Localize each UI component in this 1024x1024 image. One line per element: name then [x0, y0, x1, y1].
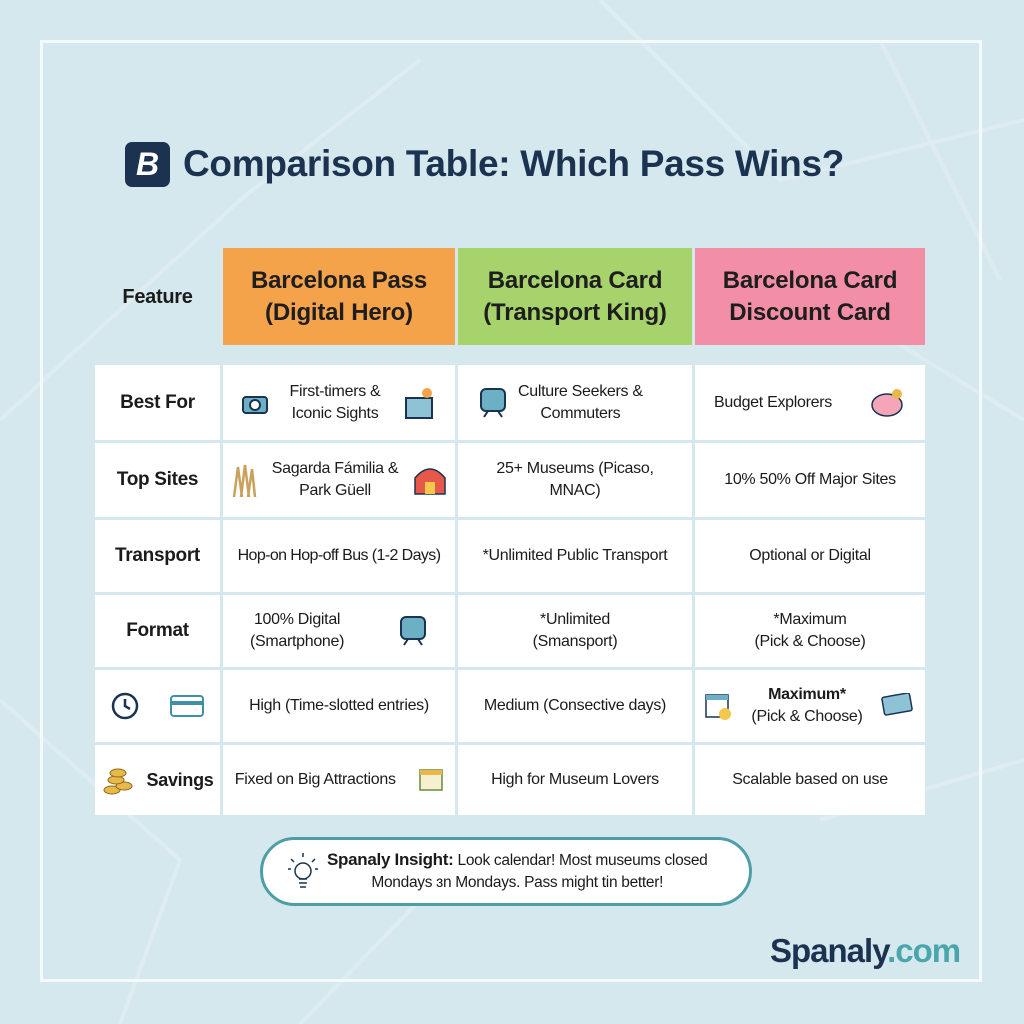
- table: (Smartphone): [250, 633, 344, 650]
- header: Barcelona Card: (Transport King): [483, 298, 667, 326]
- table: Hop-on Hop-off Bus (1-2 Days): [238, 547, 440, 564]
- callout: Spanaly Insight: Mondays ɜn Mondays. Pass might tin better!: [371, 874, 663, 891]
- table: Park Güell: [299, 482, 371, 499]
- header: Barcelona Pass: (Digital Hero): [265, 298, 413, 326]
- table: Budget Explorers: [714, 394, 832, 410]
- table: High (Time-slotted entries): [249, 697, 429, 714]
- row: Transport: Transport: [115, 545, 200, 566]
- table: Iconic Sights: [292, 404, 378, 422]
- callout: Spanaly Insight: [260, 837, 752, 906]
- title: Comparison Table: Which Pass Wins?: [183, 143, 844, 184]
- table: High for Museum Lovers: [491, 771, 659, 788]
- header: Discount Card: Barcelona Card: [723, 266, 897, 294]
- header: feature: Feature: [122, 286, 193, 308]
- table: Medium (Consective days): [484, 697, 666, 714]
- table: *Unlimited Public Transport: [483, 547, 667, 564]
- row: Savings: [95, 745, 220, 815]
- header: Barcelona Card: [458, 248, 692, 345]
- table: Commuters: [540, 404, 620, 422]
- icon: logo B: [125, 142, 170, 186]
- row: Best For: Best For: [120, 392, 195, 412]
- table: First-timers &: [290, 382, 380, 400]
- header: Discount Card: [695, 248, 925, 345]
- header: Barcelona Pass: [223, 248, 455, 345]
- table: Culture Seekers &: [518, 382, 643, 400]
- table: Fixed on Big Attractions: [235, 771, 396, 788]
- header: Barcelona Pass: Barcelona Pass: [251, 266, 427, 294]
- callout: Spanaly Insight: Spanaly Insight: Look calendar! Most museums closed: [327, 850, 707, 869]
- row: Best For: [95, 365, 220, 440]
- table: Optional or Digital: [749, 547, 871, 564]
- icon: lightbulb: [288, 853, 318, 888]
- table: *Unlimited: [540, 611, 610, 628]
- brand logo: Spanaly.com: [770, 932, 960, 969]
- table: (Pick & Choose): [751, 708, 863, 725]
- header: Discount Card: Discount Card: [729, 298, 891, 326]
- table: 100% Digital: [254, 611, 340, 628]
- table: 25+ Museums (Picaso,: [496, 460, 654, 477]
- row: Format: Format: [126, 620, 189, 641]
- table: *Maximum: [773, 611, 847, 628]
- row: Top Sites: Top Sites: [117, 469, 198, 490]
- table: Sagarda Fámilia &: [272, 460, 398, 477]
- row: Transport: [95, 520, 220, 592]
- table: (Pick & Choose): [754, 633, 866, 650]
- row: Flexibility icons: [95, 670, 220, 742]
- row: Format: [95, 595, 220, 667]
- row: Top Sites: [95, 443, 220, 517]
- table: MNAC): [550, 482, 600, 499]
- icon: logo B: B: [136, 146, 159, 182]
- table: Maximum*: [768, 686, 846, 703]
- table: (Smansport): [533, 633, 617, 650]
- header: Barcelona Card: Barcelona Card: [488, 266, 662, 294]
- table: 10% 50% Off Major Sites: [724, 471, 896, 488]
- table: Scalable based on use: [732, 771, 888, 788]
- row: Savings: Savings: [147, 770, 213, 790]
